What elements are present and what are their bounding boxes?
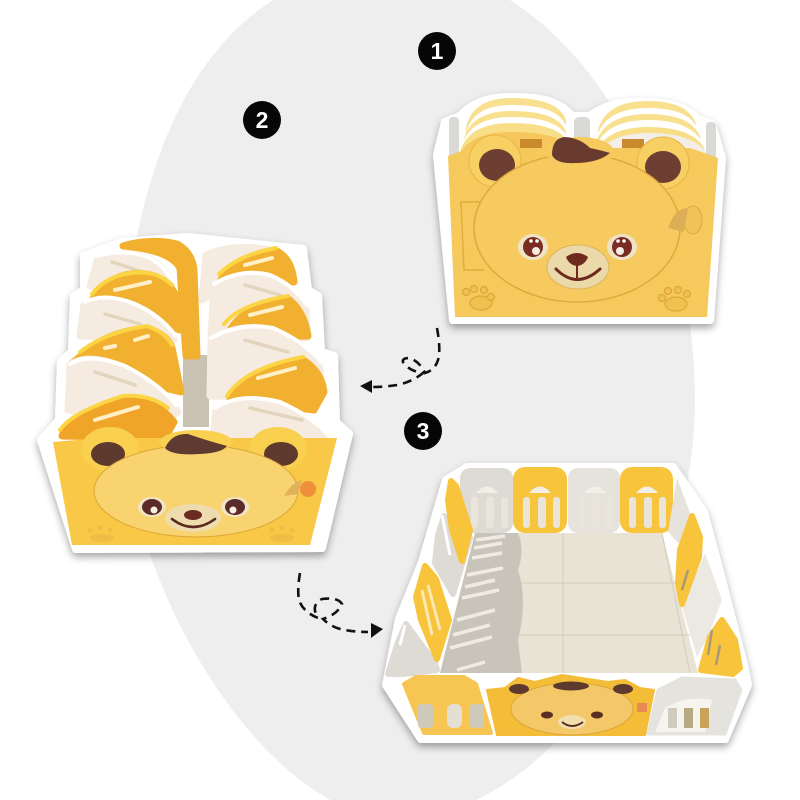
right stack bbox=[210, 248, 329, 458]
peach bbox=[284, 480, 316, 497]
open playpen bbox=[386, 467, 748, 739]
back fence bbox=[460, 467, 673, 533]
paw prints bbox=[462, 286, 690, 311]
step number 1 bbox=[418, 32, 456, 70]
front white panel bbox=[648, 678, 741, 734]
front yellow panel bbox=[404, 677, 491, 733]
shadow with slats bbox=[440, 533, 523, 673]
eyes bbox=[138, 497, 249, 517]
step number 3: 3 bbox=[417, 418, 429, 444]
step number 1: 1 bbox=[431, 38, 444, 64]
folded playpen stack bbox=[437, 97, 722, 320]
muzzle and smile bbox=[547, 245, 609, 289]
arrow 1 to 2 bbox=[360, 328, 439, 393]
left fence bbox=[388, 481, 470, 674]
tuft bbox=[165, 434, 227, 454]
front bear panel bbox=[487, 675, 654, 735]
head bbox=[94, 430, 298, 537]
step number 2: 2 bbox=[256, 107, 268, 133]
background blob bbox=[122, 0, 695, 800]
floor bbox=[440, 533, 698, 673]
left stack bbox=[60, 252, 181, 438]
back left panel bbox=[123, 241, 197, 356]
bear panel bbox=[448, 148, 718, 317]
bear panel bbox=[53, 438, 337, 545]
back right panel bbox=[202, 247, 270, 300]
step number 2 bbox=[243, 101, 281, 139]
eyes bbox=[518, 234, 637, 260]
right stacked panels bbox=[598, 101, 698, 150]
step number 3 bbox=[404, 412, 442, 450]
tuft bbox=[552, 137, 610, 163]
head bbox=[474, 137, 680, 302]
arrow 2 to 3 bbox=[298, 573, 383, 638]
ears bbox=[469, 135, 689, 189]
left stacked panels bbox=[466, 98, 566, 150]
unfolding playpen bbox=[41, 237, 349, 549]
paw prints bbox=[88, 526, 294, 542]
right fence bbox=[668, 478, 740, 674]
ears bbox=[81, 427, 307, 471]
leaf bbox=[668, 206, 702, 234]
centre floor gap bbox=[183, 355, 209, 427]
muzzle and smile bbox=[165, 504, 221, 532]
